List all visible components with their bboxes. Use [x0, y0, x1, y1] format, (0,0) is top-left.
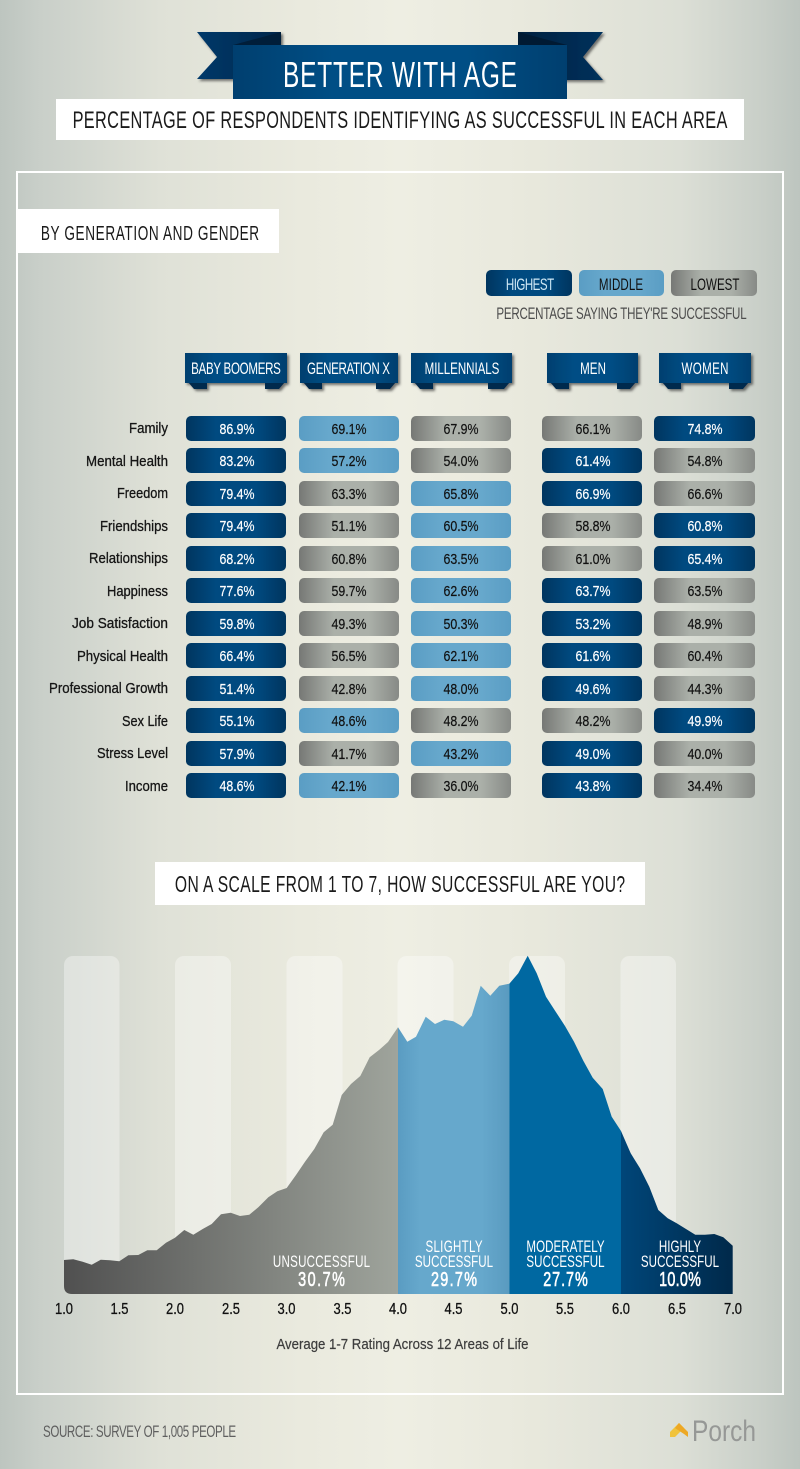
row: Friendships: 79.4%: [220, 518, 254, 535]
header: millennials: MILLENNIALS: [425, 360, 500, 379]
ribbon right tail: [518, 32, 603, 80]
row: Freedom: [117, 481, 755, 506]
row: Family: 69.1%: [332, 421, 366, 438]
row: Professional Growth: 51.4%: [220, 681, 254, 698]
row: Job Satisfaction: 49.3%: [332, 616, 366, 633]
area: unsuccessful: [64, 1027, 398, 1294]
row: Friendships: 51.1%: [332, 518, 366, 535]
row: Stress Level: [97, 741, 755, 766]
table of percentages: [49, 416, 755, 798]
legend: [486, 270, 757, 324]
row: Happiness: 63.7%: [576, 583, 610, 600]
row: Freedom: 66.9%: [576, 486, 610, 503]
row: Physical Health: 61.6%: [576, 648, 610, 665]
row: Job Satisfaction: 48.9%: [688, 616, 722, 633]
x axis labels: 3.0: [278, 1301, 296, 1318]
row: Friendships: 58.8%: [576, 518, 610, 535]
row: Sex Life: Sex Life: [122, 713, 168, 730]
legend: highest: [486, 270, 572, 296]
subtitle banner: [56, 99, 744, 140]
area: slightly successful: [398, 984, 509, 1294]
row: Freedom: 63.3%: [332, 486, 366, 503]
area: moderately successful: [509, 956, 621, 1294]
x axis labels: [55, 1301, 742, 1318]
label: moderately successful: SUCCESSFUL: [526, 1253, 605, 1272]
legend: middle: MIDDLE: [599, 276, 643, 295]
x axis labels: 7.0: [724, 1301, 742, 1318]
label: moderately successful: 27.7%: [543, 1268, 588, 1291]
row: Physical Health: 66.4%: [220, 648, 254, 665]
row: Income: Income: [125, 778, 168, 795]
row: Mental Health: 61.4%: [576, 453, 610, 470]
row: Physical Health: Physical Health: [77, 648, 168, 665]
ribbon folds: [233, 32, 567, 45]
row: Happiness: 59.7%: [332, 583, 366, 600]
row: Happiness: 62.6%: [444, 583, 478, 600]
label: slightly successful: [415, 1238, 493, 1291]
area chart: [55, 956, 742, 1353]
legend: highest: HIGHEST: [506, 276, 554, 295]
header: men: [547, 353, 638, 389]
row: Mental Health: 57.2%: [332, 453, 366, 470]
row: Stress Level: 43.2%: [444, 746, 478, 763]
legend: middle: [579, 270, 664, 296]
row: Job Satisfaction: 50.3%: [444, 616, 478, 633]
x axis labels: 1.5: [110, 1301, 129, 1318]
row: Happiness: 63.5%: [688, 583, 722, 600]
row: Freedom: 66.6%: [688, 486, 722, 503]
row: Mental Health: Mental Health: [86, 453, 168, 470]
label: highly successful: [641, 1238, 719, 1291]
label: slightly successful: SLIGHTLY: [425, 1238, 483, 1257]
logo wordmark: Porch: [692, 1415, 756, 1448]
x axis labels: 6.5: [668, 1301, 686, 1318]
title ribbon: [197, 32, 603, 100]
x axis labels: 4.0: [389, 1301, 407, 1318]
header: baby boomers: [185, 353, 287, 389]
chart background bars: [64, 956, 676, 1294]
row: Friendships: 60.5%: [444, 518, 478, 535]
row: Freedom: 65.8%: [444, 486, 478, 503]
row: Mental Health: 54.8%: [688, 453, 722, 470]
legend: lowest: LOWEST: [691, 276, 740, 295]
column headers: [185, 353, 751, 389]
row: Sex Life: 49.9%: [688, 713, 722, 730]
ribbon main band: [233, 45, 567, 100]
row: Friendships: 60.8%: [688, 518, 722, 535]
label: slightly successful: SUCCESSFUL: [415, 1253, 493, 1272]
row: Professional Growth: 44.3%: [688, 681, 722, 698]
row: Income: [125, 773, 755, 798]
row: Professional Growth: [49, 676, 755, 701]
label: slightly successful: 29.7%: [431, 1268, 477, 1291]
header: men: MEN: [580, 360, 606, 379]
row: Job Satisfaction: 53.2%: [576, 616, 610, 633]
header: baby boomers: BABY BOOMERS: [191, 360, 281, 379]
row: Freedom: 79.4%: [220, 486, 254, 503]
legend: lowest: [671, 270, 757, 296]
row: Professional Growth: 42.8%: [332, 681, 366, 698]
row: Stress Level: 57.9%: [220, 746, 254, 763]
icon: chevron: [670, 1423, 688, 1437]
row: Stress Level: 41.7%: [332, 746, 366, 763]
x axis labels: 6.0: [612, 1301, 630, 1318]
subtitle banner: PERCENTAGE OF RESPONDENTS IDENTIFYING AS SUCCESSFUL IN EACH AREA: [73, 107, 728, 134]
row: Relationships: 65.4%: [688, 551, 722, 568]
label: highly successful: SUCCESSFUL: [641, 1253, 719, 1272]
row: Mental Health: 54.0%: [444, 453, 478, 470]
row: Family: [129, 416, 755, 441]
row: Family: 74.8%: [688, 421, 722, 438]
label: unsuccessful: UNSUCCESSFUL: [273, 1253, 370, 1272]
label: moderately successful: MODERATELY: [526, 1238, 605, 1257]
row: Relationships: 61.0%: [576, 551, 610, 568]
section heading: by generation and gender: [17, 209, 279, 253]
row: Sex Life: 48.6%: [332, 713, 366, 730]
row: Income: 34.4%: [688, 778, 722, 795]
row: Income: 36.0%: [444, 778, 478, 795]
row: Physical Health: 56.5%: [332, 648, 366, 665]
row: Family: 86.9%: [220, 421, 254, 438]
row: Happiness: 77.6%: [220, 583, 254, 600]
x axis labels: 1.0: [55, 1301, 73, 1318]
x axis labels: 4.5: [444, 1301, 463, 1318]
area: highly successful: [621, 1131, 733, 1294]
row: Relationships: [89, 546, 755, 571]
row: Income: 48.6%: [220, 778, 254, 795]
label: highly successful: 10.0%: [659, 1268, 701, 1291]
row: Mental Health: [86, 448, 755, 473]
axis caption: Average 1-7 Rating Across 12 Areas of Life: [276, 1336, 528, 1353]
row: Happiness: Happiness: [107, 583, 168, 600]
row: Family: 66.1%: [576, 421, 610, 438]
label: unsuccessful: 30.7%: [298, 1268, 345, 1291]
header: generation x: [300, 353, 398, 389]
row: Sex Life: 48.2%: [576, 713, 610, 730]
row: Relationships: 63.5%: [444, 551, 478, 568]
main panel frame: [17, 172, 783, 1394]
row: Sex Life: [122, 708, 755, 733]
row: Friendships: Friendships: [100, 518, 168, 535]
row: Stress Level: Stress Level: [97, 745, 168, 762]
row: Happiness: [107, 578, 755, 603]
label: moderately successful: [526, 1238, 605, 1291]
x axis labels: 2.0: [166, 1301, 184, 1318]
x axis labels: 3.5: [334, 1301, 352, 1318]
ribbon left tail: [197, 32, 281, 79]
row: Relationships: 60.8%: [332, 551, 366, 568]
row: Physical Health: 60.4%: [688, 648, 722, 665]
row: Professional Growth: 49.6%: [576, 681, 610, 698]
row: Stress Level: 49.0%: [576, 746, 610, 763]
legend caption: PERCENTAGE SAYING THEY'RE SUCCESSFUL: [496, 305, 747, 324]
row: Mental Health: 83.2%: [220, 453, 254, 470]
logo: Porch: [670, 1415, 756, 1448]
label: unsuccessful: [273, 1253, 370, 1291]
x axis labels: 5.0: [500, 1301, 519, 1318]
header: generation x: GENERATION X: [307, 360, 390, 379]
x axis labels: 5.5: [556, 1301, 574, 1318]
row: Job Satisfaction: [72, 611, 755, 636]
row: Professional Growth: 48.0%: [444, 681, 478, 698]
header: women: [659, 353, 751, 389]
row: Relationships: 68.2%: [220, 551, 254, 568]
row: Friendships: [100, 513, 755, 538]
section heading: scale question: [155, 862, 645, 905]
row: Physical Health: [77, 643, 755, 668]
source note: SOURCE: SURVEY OF 1,005 PEOPLE: [43, 1423, 236, 1442]
row: Income: 42.1%: [332, 778, 366, 795]
row: Job Satisfaction: 59.8%: [220, 616, 254, 633]
header: women: WOMEN: [682, 360, 728, 379]
row: Sex Life: 55.1%: [220, 713, 254, 730]
section heading: by generation and gender: BY GENERATION AND GENDER: [41, 222, 259, 245]
row: Stress Level: 40.0%: [688, 746, 722, 763]
title text: BETTER WITH AGE: [283, 54, 517, 95]
section heading: scale question: ON A SCALE FROM 1 TO 7, HOW SUCCESSFUL ARE YOU?: [175, 872, 625, 898]
row: Income: 43.8%: [576, 778, 610, 795]
row: Sex Life: 48.2%: [444, 713, 478, 730]
header: millennials: [411, 353, 512, 389]
row: Family: Family: [129, 420, 168, 437]
label: highly successful: HIGHLY: [659, 1238, 701, 1257]
row: Job Satisfaction: Job Satisfaction: [72, 615, 168, 632]
x axis labels: 2.5: [222, 1301, 240, 1318]
row: Relationships: Relationships: [89, 550, 168, 567]
row: Freedom: Freedom: [117, 485, 168, 502]
row: Professional Growth: Professional Growth: [49, 680, 168, 697]
row: Family: 67.9%: [444, 421, 478, 438]
row: Physical Health: 62.1%: [444, 648, 478, 665]
